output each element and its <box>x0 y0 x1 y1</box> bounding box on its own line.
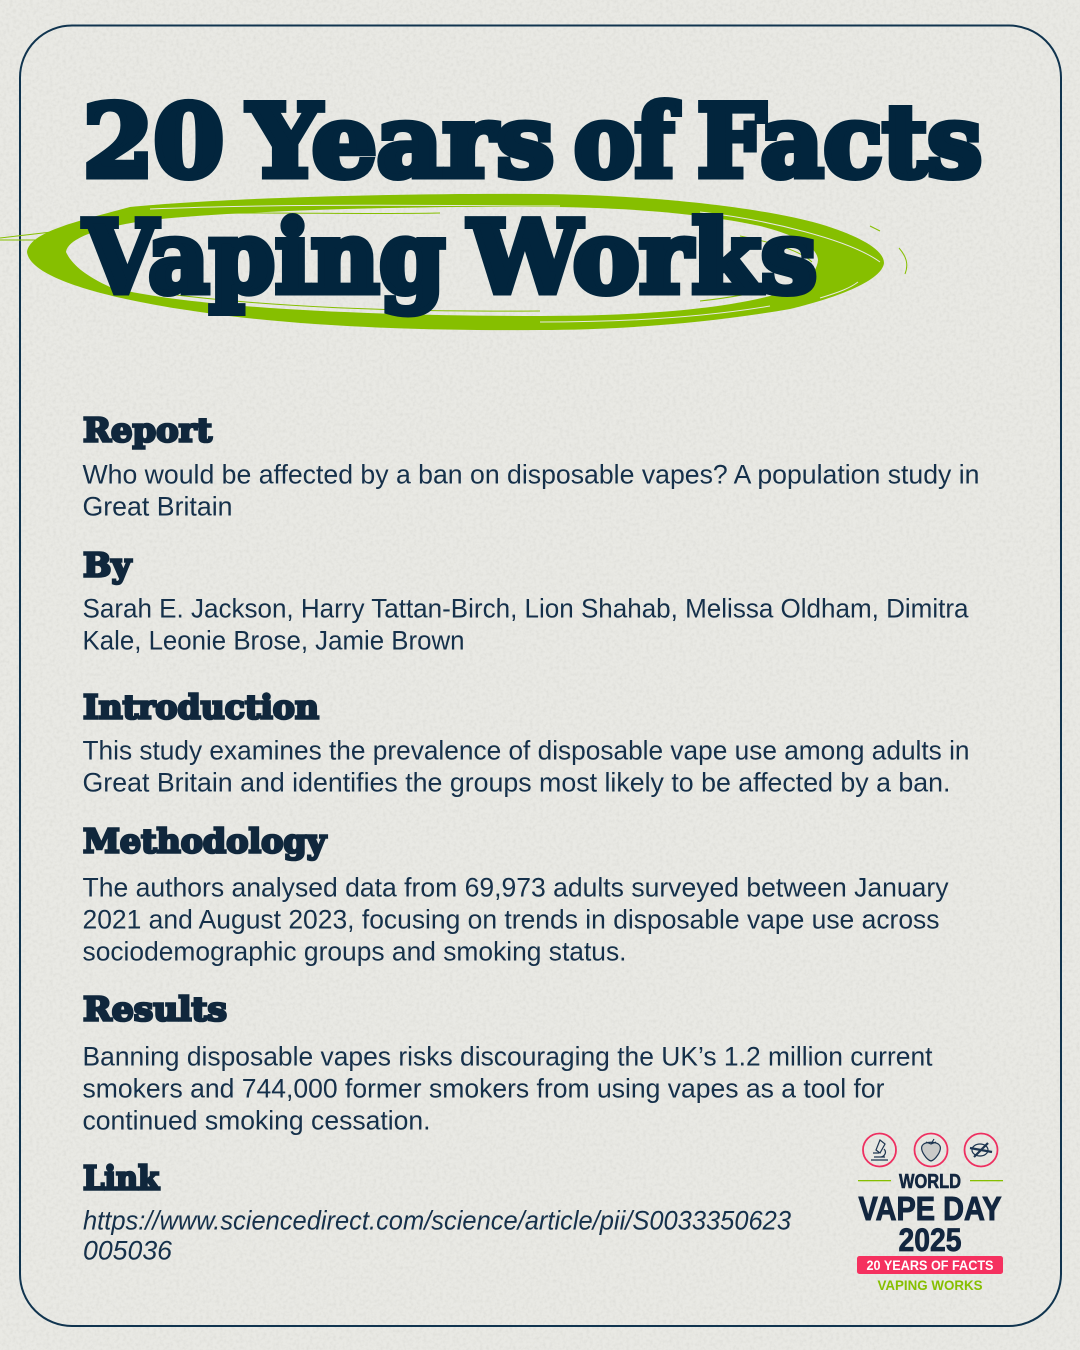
section: methodology: The authors analysed data from 69,973 adults surveyed between January <box>82 872 949 902</box>
section: results: Results <box>83 990 227 1028</box>
section: by: Kale, Leonie Brose, Jamie Brown <box>82 626 464 656</box>
section: report: Great Britain <box>82 492 232 522</box>
icon: crossed-out cigarette <box>964 1134 998 1166</box>
section: methodology: Methodology <box>83 822 327 860</box>
section: by: Sarah E. Jackson, Harry Tattan-Birch, Lion Shahab, Melissa Oldham, Dimitra <box>82 594 969 624</box>
section: link: https://www.sciencedirect.com/science/article/pii/S0033350623 <box>83 1206 791 1236</box>
logo: World Vape Day 2025 <box>857 1134 1003 1293</box>
section: results: Banning disposable vapes risks discouraging the UK’s 1.2 million current <box>82 1042 933 1072</box>
title: Works <box>468 200 817 316</box>
section: introduction: Great Britain and identifies the groups most likely to be affected by a ban. <box>82 768 950 798</box>
section: report: Report <box>83 410 213 450</box>
section: results: continued smoking cessation. <box>82 1106 430 1136</box>
logo text: vape day: VAPE DAY <box>858 1190 1002 1227</box>
section: link <box>83 1158 791 1266</box>
title: Facts <box>697 84 982 200</box>
section: by <box>82 546 969 656</box>
pink badge: 20 YEARS OF FACTS <box>866 1257 994 1273</box>
green brush ellipse <box>0 194 907 330</box>
section: introduction: This study examines the prevalence of disposable vape use among adults in <box>82 736 970 766</box>
section: introduction <box>82 688 970 798</box>
title: Years <box>247 84 554 200</box>
section: introduction: Introduction <box>83 688 319 726</box>
section: methodology <box>82 822 949 966</box>
decorative rule right <box>970 1180 1003 1181</box>
decorative rule left <box>858 1180 891 1181</box>
title: of <box>574 84 679 200</box>
section: link: 005036 <box>83 1236 173 1266</box>
section: results: smokers and 744,000 former smokers from using vapes as a tool for <box>82 1074 885 1104</box>
section: methodology: 2021 and August 2023, focusing on trends in disposable vape use across <box>82 904 940 934</box>
section: by: By <box>83 546 132 584</box>
logo text: world: WORLD <box>899 1171 961 1193</box>
icon: microscope <box>863 1134 896 1166</box>
section: methodology: sociodemographic groups and smoking status. <box>82 936 626 966</box>
section: results <box>82 990 933 1136</box>
section: report <box>82 410 980 522</box>
title: 20 <box>83 84 224 200</box>
logo text: vaping works: VAPING WORKS <box>878 1277 982 1293</box>
title <box>83 84 982 316</box>
icon: strawberry <box>914 1134 948 1166</box>
section: report: Who would be affected by a ban on disposable vapes? A population study in <box>82 460 980 490</box>
section: link: Link <box>83 1158 160 1198</box>
logo text: 2025: 2025 <box>898 1222 962 1258</box>
title: Vaping <box>83 200 445 316</box>
